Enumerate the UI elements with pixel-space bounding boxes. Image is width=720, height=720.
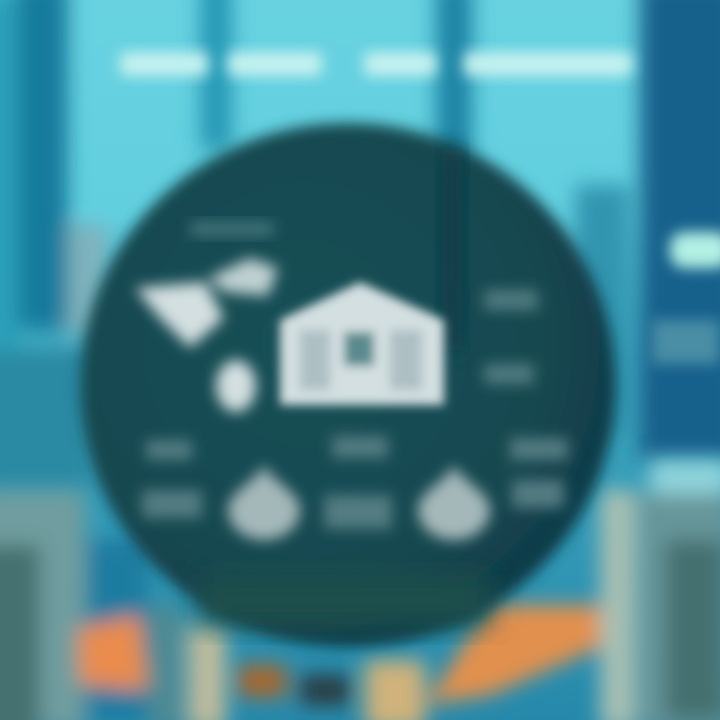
heading bar inside circle bbox=[190, 222, 274, 236]
icon: left water drop bbox=[228, 465, 300, 540]
bottom buildings and orange roofs bbox=[0, 460, 720, 720]
right side callout bbox=[652, 232, 720, 364]
right text block bbox=[484, 290, 538, 384]
icon: bank building bbox=[280, 282, 444, 405]
icon: right water drop bbox=[418, 465, 490, 540]
title bars (illegible text) bbox=[120, 52, 632, 76]
lower text blocks bbox=[142, 436, 568, 529]
icon: world map bbox=[135, 258, 278, 412]
central dark circle panel bbox=[80, 123, 616, 647]
